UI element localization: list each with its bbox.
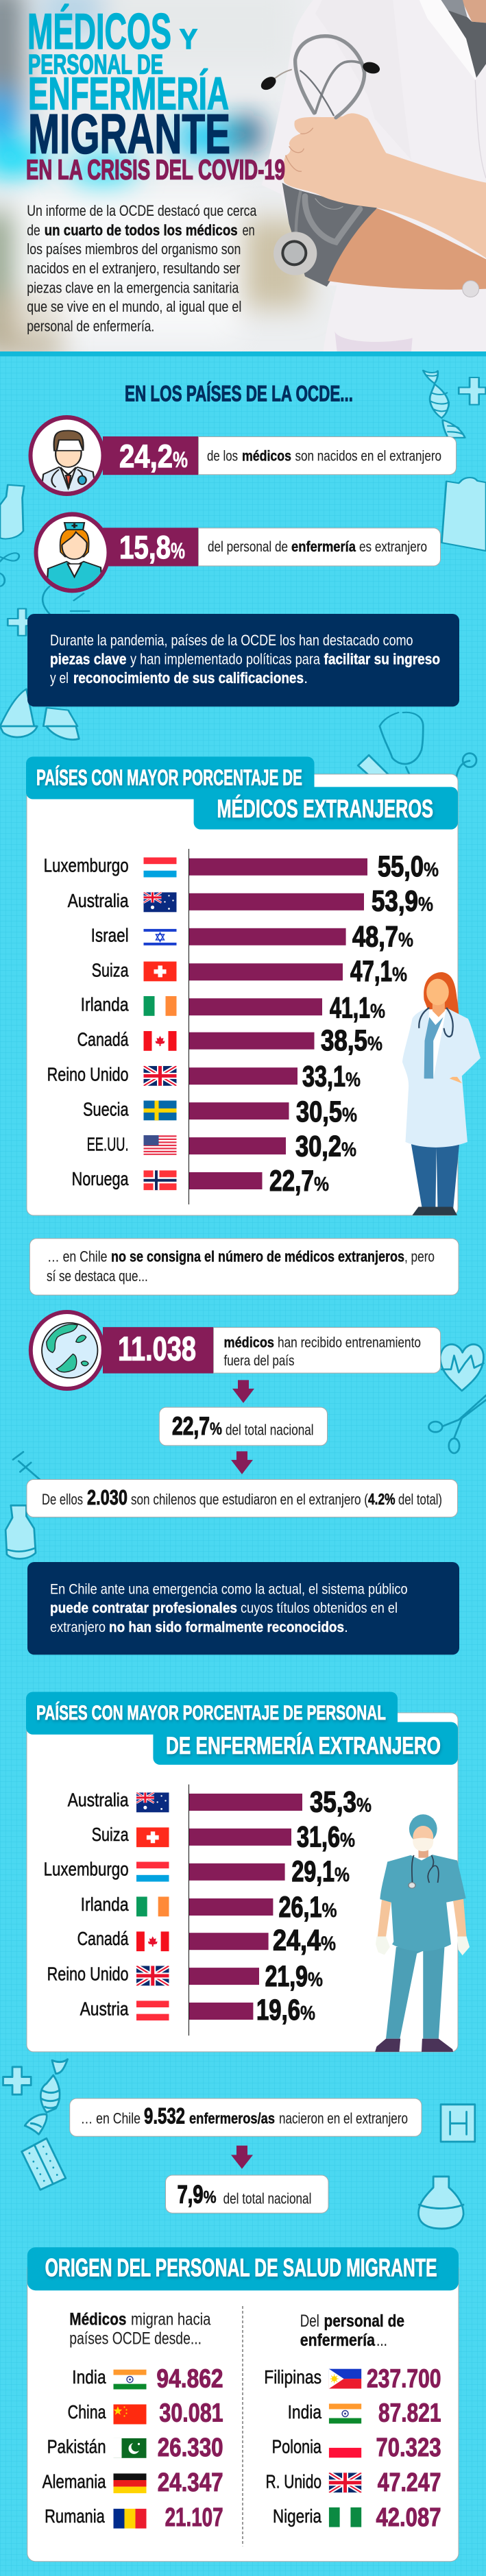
row: Reino Unido	[47, 1061, 361, 1093]
stat: 2.030 Chileans: del total)	[398, 1491, 442, 1508]
row: Suiza: Suiza	[92, 959, 129, 981]
row: India	[72, 2365, 223, 2394]
row: Suiza	[92, 955, 407, 988]
row: Noruega: Noruega	[72, 1168, 129, 1189]
column heading: Médicos	[69, 2310, 126, 2329]
title	[26, 4, 285, 186]
row: Irlanda	[81, 992, 385, 1025]
row: Reino Unido	[47, 1960, 323, 1993]
row: Israel: Israel	[91, 925, 129, 945]
row: China	[68, 2399, 223, 2428]
callout: public system: En Chile ante una emergencia como la actual, el sistema público	[50, 1581, 408, 1597]
row: India: 87.821	[378, 2399, 441, 2428]
callout: public system: puede contratar profesionales	[50, 1600, 237, 1616]
row: Polonia: Polonia	[272, 2436, 321, 2457]
stat: 24,2% doctors: médicos	[242, 448, 291, 465]
stat: 11.038 doctors trained abroad: médicos	[223, 1335, 274, 1351]
stat: 24,2% doctors: son nacidos en el extranjero	[295, 448, 441, 465]
note: Chile has no doctor count: no se consigna el número de médicos extranjeros	[111, 1248, 404, 1265]
note: Chile has no doctor count: … en Chile	[47, 1248, 107, 1265]
note: 9.532 nurses in Chile: enfermeros/as	[189, 2109, 275, 2127]
row: India: India	[72, 2366, 106, 2388]
panel heading tabs: PAÍSES CON MAYOR PORCENTAJE DE	[36, 765, 302, 790]
stat: 22,7% of national total: del total nacional	[226, 1422, 314, 1439]
column heading: Del	[300, 2312, 319, 2331]
row: Reino Unido: 21,9	[265, 1960, 308, 1993]
stat: 24,2% doctors: %	[173, 447, 188, 472]
row: EE.UU.: %	[341, 1139, 356, 1161]
row: Australia: %	[418, 893, 433, 915]
row: Alemania: 24.347	[158, 2468, 223, 2497]
stat: 24,2% doctors	[29, 415, 457, 496]
column heading: ...	[376, 2331, 387, 2350]
row: Irlanda: 26,1	[278, 1891, 322, 1924]
row: Nigeria	[273, 2503, 441, 2532]
column: nurses origin	[264, 2312, 441, 2532]
row: Luxemburgo	[44, 1855, 350, 1888]
note: 9.532 nurses in Chile	[70, 2098, 422, 2136]
row: Canadá: Canadá	[77, 1029, 129, 1050]
background icons: medical chart section	[0, 726, 476, 789]
background icons: upper section	[0, 371, 486, 726]
note: Chile has no doctor count: sí se destaca que...	[47, 1267, 148, 1285]
row: China: 30.081	[159, 2399, 223, 2428]
illustration: female doctor	[402, 972, 481, 1215]
row: Suiza: %	[392, 964, 407, 986]
stat: 11.038 doctors trained abroad	[29, 1310, 441, 1391]
row: Reino Unido: Reino Unido	[47, 1963, 129, 1984]
stat: 15,8% nurses: 15,8	[119, 530, 171, 566]
stat: 24,2% doctors: de los	[207, 448, 238, 465]
doctor figure	[258, 0, 486, 351]
row: China: China	[68, 2401, 106, 2423]
stethoscope	[274, 36, 365, 242]
row: Pakistán: Pakistán	[47, 2436, 106, 2457]
row: Rumania: Rumania	[45, 2505, 105, 2527]
arrow down	[232, 1380, 254, 1403]
stat: 11.038 doctors trained abroad: 11.038	[118, 1330, 196, 1367]
row: Irlanda: Irlanda	[81, 1894, 129, 1915]
row: Suiza: Suiza	[92, 1824, 129, 1845]
row: Alemania: Alemania	[42, 2471, 106, 2492]
bar chart: doctors	[44, 849, 439, 1204]
row: Polonia: 70.323	[376, 2433, 441, 2462]
intro paragraph: un cuarto de todos los médicos	[45, 221, 238, 238]
row: Nigeria: 42.087	[376, 2503, 441, 2532]
row: Suecia: Suecia	[83, 1098, 129, 1119]
row: Canadá	[77, 1924, 336, 1957]
row: Australia	[68, 1786, 372, 1819]
intro paragraph: que se vive en el mundo, al igual que el	[27, 298, 241, 315]
icon: globe	[42, 1323, 97, 1378]
row: India: India	[288, 2401, 321, 2423]
row: Suiza: %	[340, 1830, 355, 1852]
stat: 15,8% nurses: enfermería	[291, 538, 356, 555]
note: 9.532 nurses in Chile: nacieron en el extranjero	[279, 2109, 408, 2127]
title: ENFERMERÍA	[28, 68, 229, 119]
row: Irlanda	[81, 1891, 337, 1924]
icon: doctor	[42, 430, 95, 492]
row: Irlanda: Irlanda	[81, 993, 129, 1015]
panel: countries with most foreign doctors	[26, 756, 481, 1215]
stat: 2.030 Chileans: 2.030	[87, 1485, 127, 1509]
stat: 2.030 Chileans: De ellos	[42, 1491, 83, 1508]
column heading: países OCDE desde...	[69, 2329, 202, 2349]
row: Reino Unido: %	[308, 1969, 323, 1991]
intro paragraph: piezas clave en la emergencia sanitaria	[27, 279, 239, 296]
icon: nurse	[47, 523, 103, 592]
row: Nigeria: Nigeria	[273, 2505, 321, 2527]
intro paragraph: en	[243, 221, 255, 238]
stat: 22,7% of national total	[159, 1407, 328, 1446]
note: 9.532 nurses in Chile: 9.532	[144, 2103, 185, 2128]
row: Luxemburgo: %	[424, 859, 439, 881]
row: Austria: Austria	[80, 1998, 129, 2019]
row: Irlanda: %	[322, 1900, 337, 1922]
panel: countries with most foreign nurses	[26, 1692, 470, 2052]
title: MÉDICOS	[27, 4, 171, 60]
row: Luxemburgo: 55,0	[378, 850, 424, 883]
callout: public system: cuyos títulos obtenidos en el	[241, 1600, 398, 1616]
row: Australia: 53,9	[372, 885, 418, 918]
title: MIGRANTE	[28, 103, 230, 165]
row: Filipinas	[264, 2365, 441, 2394]
intro paragraph: personal de enfermería.	[27, 317, 154, 334]
row: Reino Unido: %	[345, 1069, 361, 1091]
column heading	[69, 2310, 211, 2349]
stat: 22,7% of national total: 22,7	[172, 1412, 210, 1440]
row: EE.UU.: 30,2	[295, 1130, 341, 1163]
row: Noruega: 22,7	[269, 1165, 314, 1198]
row: Noruega: %	[314, 1174, 329, 1196]
stat: 2.030 Chileans: son chilenos que estudiaron en el extranjero (	[131, 1491, 369, 1508]
stat: 2.030 Chileans: 4.2%	[368, 1490, 395, 1508]
header photo: doctor holding stethoscope	[0, 0, 486, 356]
row: Canadá: %	[321, 1933, 336, 1955]
stat: 24,2% doctors: 24,2	[119, 438, 173, 475]
row: Suecia	[83, 1095, 357, 1128]
row: Luxemburgo: Luxemburgo	[44, 855, 129, 876]
row: Luxemburgo: Luxemburgo	[44, 1859, 129, 1880]
row: Israel: 48,7	[352, 920, 398, 953]
row: R. Unido	[266, 2468, 441, 2497]
row: Israel: %	[398, 929, 413, 951]
background icons: lower section	[3, 2059, 475, 2229]
callout: pandemic policies: .	[304, 669, 308, 686]
row: Australia: Australia	[68, 890, 129, 911]
callout: pandemic policies: piezas clave	[50, 650, 126, 667]
callout: public system: extranjero	[50, 1619, 106, 1635]
row: Canadá	[77, 1024, 382, 1057]
intro paragraph: Un informe de la OCDE destacó que cerca	[27, 202, 257, 219]
row: Noruega	[72, 1165, 329, 1198]
stat: 7,9% of national total: del total nacional	[223, 2190, 311, 2207]
row: EE.UU.	[87, 1130, 356, 1163]
row: Austria: 19,6	[256, 1994, 300, 2027]
row: Pakistán: 26.330	[158, 2433, 223, 2462]
row: Polonia	[272, 2433, 441, 2462]
note: Chile has no doctor count	[29, 1239, 459, 1295]
row: Suecia: 30,5	[296, 1095, 342, 1128]
row: Australia: Australia	[68, 1789, 129, 1810]
arrow down	[231, 1451, 253, 1474]
title: Y	[180, 23, 197, 55]
callout: pandemic policies: facilitar su ingreso	[324, 650, 440, 667]
row: Filipinas: Filipinas	[264, 2366, 321, 2388]
bar chart: nurses	[44, 1785, 372, 2035]
row: Reino Unido: 33,1	[302, 1061, 345, 1093]
row: India: 94.862	[156, 2365, 223, 2394]
row: Suiza: 47,1	[350, 955, 392, 988]
panel heading	[27, 2247, 459, 2290]
row: Canadá: %	[367, 1033, 382, 1055]
row: Irlanda: %	[370, 1001, 385, 1023]
row: Reino Unido: Reino Unido	[47, 1063, 129, 1085]
stat: 22,7% of national total: %	[210, 1420, 222, 1439]
background icons: Chile section	[5, 1344, 486, 1559]
row: Austria	[80, 1994, 315, 2027]
header divider band	[0, 351, 486, 356]
column heading: personal de	[324, 2312, 404, 2331]
callout: public system: no han sido formalmente reconocidos	[109, 1619, 344, 1635]
column heading	[300, 2312, 404, 2350]
title: EN LA CRISIS DEL COVID-19	[26, 154, 285, 186]
row: EE.UU.: EE.UU.	[87, 1133, 129, 1154]
row: Canadá: 38,5	[321, 1024, 367, 1057]
row: Pakistán	[47, 2433, 223, 2462]
stat: 15,8% nurses: del personal de	[208, 538, 288, 555]
row: Rumania: 21.107	[165, 2503, 223, 2532]
note: Chile has no doctor count: , pero	[404, 1248, 435, 1265]
illustration: male nurse	[375, 1814, 470, 2052]
row: Rumania	[45, 2503, 223, 2532]
intro paragraph: los países miembros del organismo son	[27, 240, 241, 258]
title: PERSONAL DE	[28, 49, 163, 79]
callout: pandemic policies	[27, 614, 459, 706]
row: Filipinas: 237.700	[367, 2365, 441, 2394]
row: Alemania	[42, 2468, 223, 2497]
row: Australia	[68, 885, 433, 918]
row: Canadá: Canadá	[77, 1928, 129, 1949]
stat: 7,9% of national total: 7,9	[178, 2181, 204, 2209]
row: Suecia: %	[342, 1104, 357, 1126]
row: Luxemburgo: %	[335, 1864, 350, 1886]
row: Austria: %	[300, 2003, 315, 2024]
row: Israel	[91, 920, 413, 953]
arrow down	[231, 2146, 253, 2169]
row: Suiza	[92, 1821, 355, 1854]
stat: 15,8% nurses: es extranjero	[359, 538, 427, 555]
row: Australia: 35,3	[310, 1786, 356, 1819]
panel heading tabs	[26, 756, 458, 830]
callout: public system: .	[344, 1619, 348, 1635]
stat: 7,9% of national total: %	[204, 2188, 217, 2207]
intro paragraph: nacidos en el extranjero, resultando ser	[27, 260, 241, 277]
column heading: enfermería	[300, 2331, 376, 2350]
stat: 15,8% nurses: %	[171, 538, 185, 563]
row: R. Unido: R. Unido	[266, 2471, 321, 2492]
row: Canadá: 24,4	[273, 1924, 321, 1957]
stat: 15,8% nurses	[34, 512, 441, 593]
row: Australia: %	[356, 1795, 372, 1817]
row: Irlanda: 41,1	[330, 992, 370, 1025]
callout: pandemic policies: reconocimiento de sus calificaciones	[73, 669, 304, 686]
row: Luxemburgo: 29,1	[292, 1855, 335, 1888]
row: Suiza: 31,6	[297, 1821, 340, 1854]
panel heading tabs	[26, 1692, 458, 1765]
stat: 11.038 doctors trained abroad: han recibido entrenamiento	[278, 1335, 421, 1351]
note: 9.532 nurses in Chile: … en Chile	[81, 2109, 141, 2127]
column heading: migran hacia	[131, 2310, 211, 2329]
stat: 11.038 doctors trained abroad: fuera del país	[223, 1352, 295, 1369]
intro paragraph	[27, 202, 257, 334]
column: doctors origin	[42, 2310, 223, 2532]
section heading: OCDE: EN LOS PAÍSES DE LA OCDE...	[125, 380, 353, 406]
row: R. Unido: 47.247	[378, 2468, 441, 2497]
row: India	[288, 2399, 441, 2428]
callout: public system	[27, 1562, 459, 1655]
callout: pandemic policies: y han implementado políticas para	[130, 650, 320, 667]
callout: pandemic policies: y el	[50, 669, 69, 686]
intro paragraph: de	[27, 221, 40, 238]
stat: 2.030 Chileans	[27, 1480, 458, 1517]
panel: origin of migrant health personnel	[27, 2247, 459, 2562]
row: Luxemburgo	[44, 850, 439, 883]
stat: 7,9% of national total	[166, 2175, 328, 2213]
